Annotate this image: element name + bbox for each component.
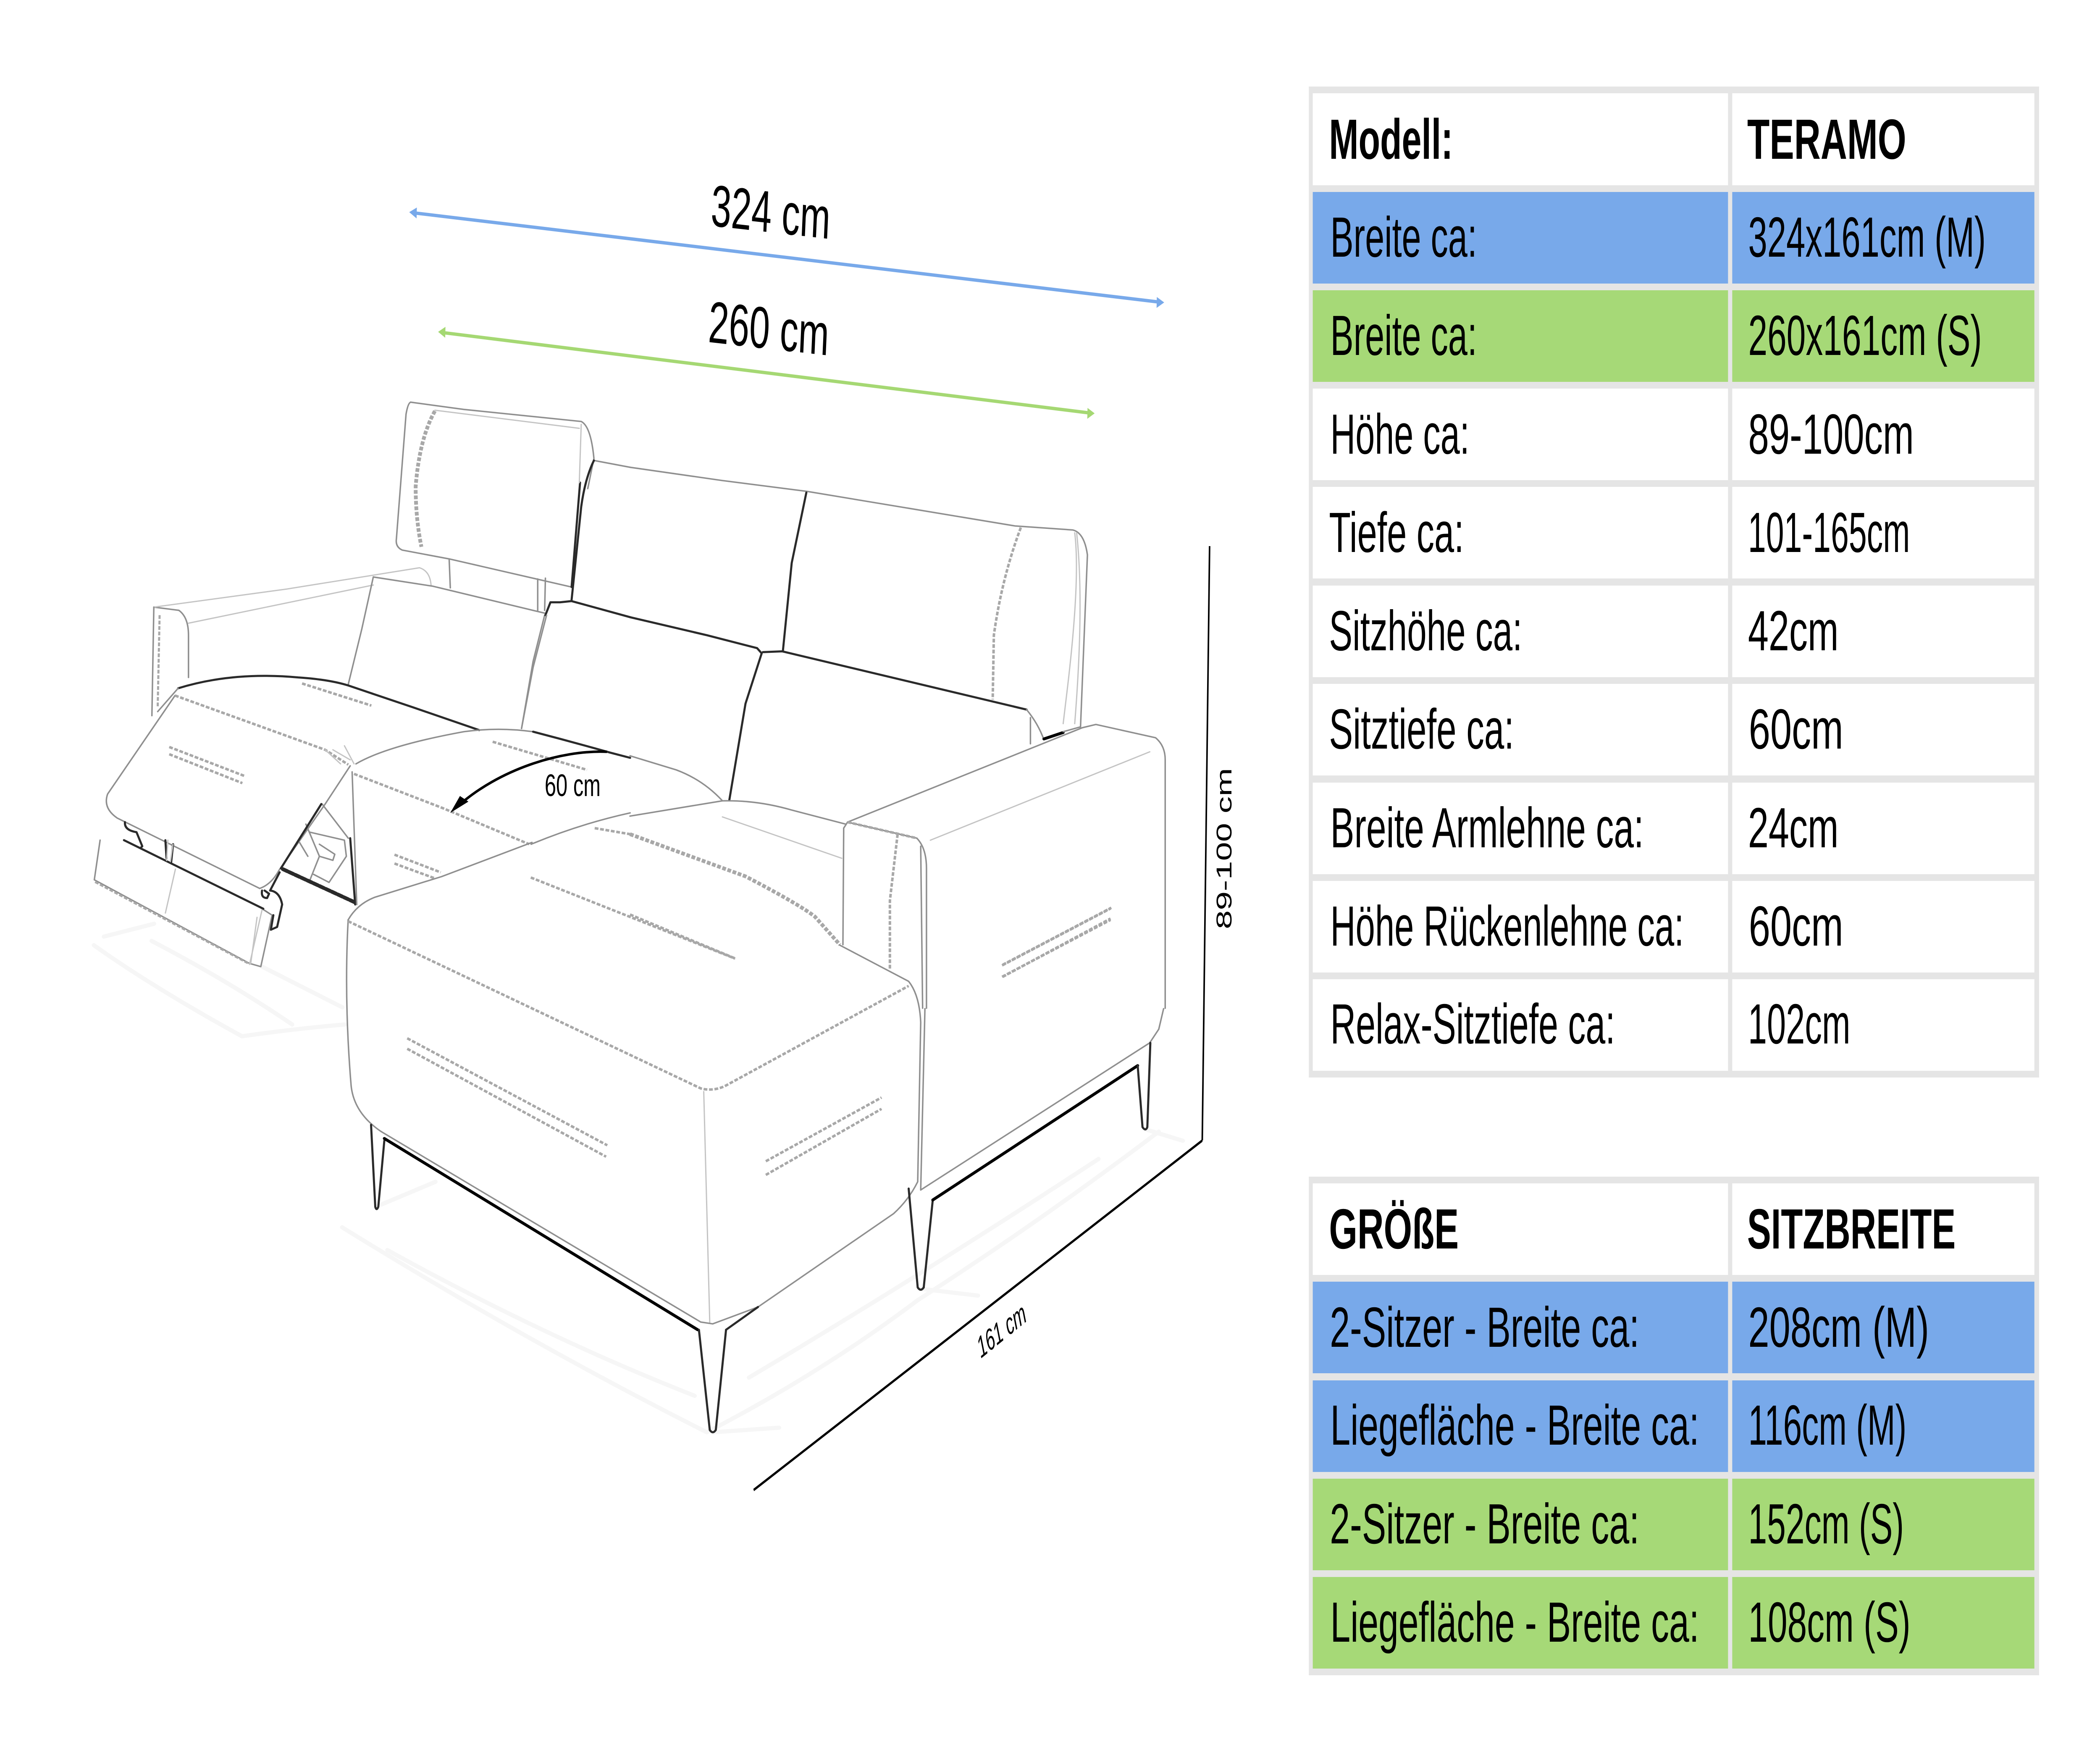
row: Modell: Modell: (1329, 108, 1453, 171)
footrest panel and hinge (94, 840, 282, 967)
reclining mechanism (125, 804, 355, 904)
row: Liegefläche M (1313, 1380, 2034, 1472)
row: Modell: TERAMO (1747, 108, 1906, 171)
right armrest (843, 725, 1165, 1008)
right front leg (908, 1188, 933, 1290)
row: Liegefläche S (1313, 1577, 2034, 1669)
row: Höhe: Höhe ca: (1331, 402, 1470, 466)
right seat (630, 756, 845, 959)
table: model specifications (1309, 87, 2039, 1078)
row: Breite M: 324x161cm (M) (1748, 205, 1986, 269)
table: sizes and seat widths (1309, 1177, 2039, 1675)
label: 161 cm: 161 cm (973, 1296, 1029, 1364)
row: Liegefläche M: 116cm (M) (1748, 1393, 1906, 1457)
row: Höhe Rückenlehne: Höhe Rückenlehne ca: (1331, 894, 1684, 958)
sofa: right section (back, arm) (630, 467, 1165, 1008)
row: Modell (1313, 93, 2034, 185)
centre leg (699, 1330, 726, 1432)
row: Breite S (1313, 290, 2034, 382)
middle seat (352, 729, 630, 904)
raised footrest cushion (106, 696, 354, 888)
label: 89-100 cm: 89-100 cm (1212, 768, 1236, 929)
row: Relax-Sitztiefe: Relax-Sitztiefe ca: (1331, 992, 1615, 1056)
height dimension line (1202, 546, 1210, 1141)
row: Breite Armlehne: 24cm (1748, 796, 1839, 859)
row: Tiefe: 101-165cm (1748, 501, 1910, 564)
row: Höhe (1313, 389, 2034, 480)
row: Breite S: 260x161cm (S) (1748, 304, 1982, 367)
row: Breite S: Breite ca: (1331, 304, 1477, 367)
row: Relax-Sitztiefe (1313, 979, 2034, 1071)
row: Breite M: Breite ca: (1331, 205, 1477, 269)
row: Höhe: 89-100cm (1748, 402, 1914, 466)
row: Sitztiefe (1313, 684, 2034, 775)
row: 2-Sitzer M: 208cm (M) (1748, 1296, 1929, 1359)
row: Tiefe: Tiefe ca: (1329, 501, 1464, 564)
row: Liegefläche S: Liegefläche - Breite ca: (1331, 1590, 1699, 1654)
row: Liegefläche M: Liegefläche - Breite ca: (1331, 1393, 1699, 1457)
recliner seat (158, 676, 479, 730)
chaise front top edge (531, 813, 630, 844)
row: Liegefläche S: 108cm (S) (1748, 1590, 1911, 1654)
row: 2-Sitzer M: 2-Sitzer - Breite ca: (1330, 1296, 1639, 1359)
front left leg (371, 1125, 384, 1209)
row: Tiefe (1313, 487, 2034, 578)
headrest (396, 402, 594, 610)
front back-cushion (630, 617, 1081, 800)
seat depth arrow (450, 752, 607, 813)
row: 2-Sitzer M (1313, 1282, 2034, 1373)
row: Breite Armlehne: Breite Armlehne ca: (1331, 796, 1644, 859)
green width arrow (438, 327, 1095, 419)
floor shadow (94, 924, 1183, 1432)
sofa: left section (headrest, left back, recliner) (106, 402, 630, 904)
chaise and legs (346, 842, 1163, 1432)
label: 324 cm: 324 cm (710, 172, 832, 252)
row: 2-Sitzer S (1313, 1479, 2034, 1570)
chaise body (346, 842, 921, 1324)
row: 2-Sitzer S: 2-Sitzer - Breite ca: (1330, 1492, 1639, 1556)
row: Sitzhöhe: Sitzhöhe ca: (1329, 599, 1522, 662)
side rail (933, 1066, 1138, 1200)
back cushions (630, 467, 1087, 728)
blue width arrow (409, 208, 1164, 308)
row: Größe header: GRÖßE (1329, 1197, 1459, 1261)
row: 2-Sitzer S: 152cm (S) (1748, 1492, 1904, 1556)
row: Größe header: SITZBREITE (1747, 1197, 1956, 1261)
row: Relax-Sitztiefe: 102cm (1748, 992, 1851, 1056)
row: Höhe Rückenlehne (1313, 881, 2034, 972)
far right leg (1138, 1043, 1150, 1129)
row: Sitztiefe: Sitztiefe ca: (1329, 697, 1514, 761)
left back cushion (348, 577, 572, 728)
back cushion top middle (572, 460, 630, 617)
right arm lower body (921, 909, 1163, 1190)
label: 60 cm: 60 cm (545, 768, 601, 803)
label: 260 cm: 260 cm (707, 289, 830, 368)
sofa line drawing (94, 402, 1183, 1432)
row: Sitztiefe: 60cm (1749, 697, 1843, 761)
row: Breite M (1313, 192, 2034, 284)
front rail (384, 1138, 758, 1330)
row: Größe header (1313, 1183, 2034, 1275)
row: Sitzhöhe: 42cm (1748, 599, 1839, 662)
row: Höhe Rückenlehne: 60cm (1749, 894, 1843, 958)
depth dimension line (753, 1141, 1202, 1490)
row: Breite Armlehne (1313, 783, 2034, 874)
row: Sitzhöhe (1313, 586, 2034, 677)
left armrest (152, 568, 431, 716)
